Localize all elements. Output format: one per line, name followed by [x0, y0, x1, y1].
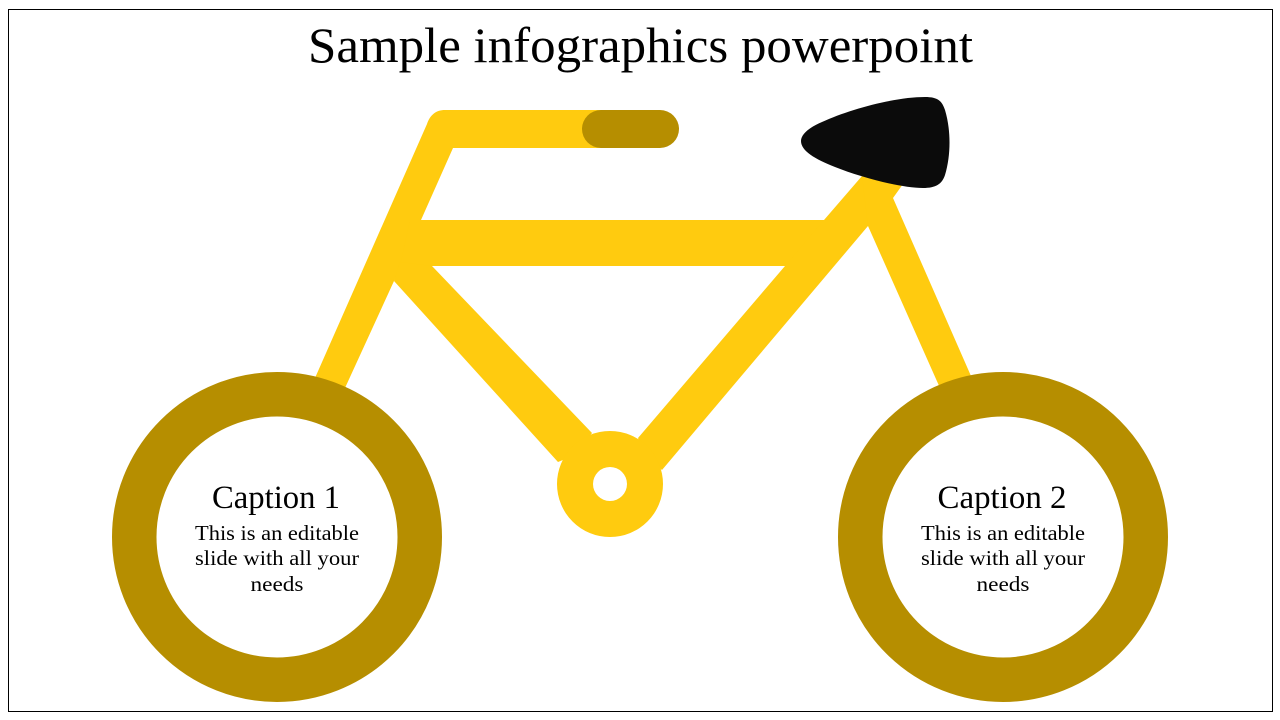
caption 1 heading: Caption 1: [212, 480, 340, 516]
rear stay: [862, 176, 971, 388]
caption 2 body: This is an editable: [921, 521, 1085, 545]
left wheel with caption 1: [134, 394, 420, 680]
saddle: [801, 97, 950, 188]
caption 2 body: [921, 521, 1085, 596]
caption 2 heading: Caption 2: [938, 480, 1066, 516]
caption 1 body: needs: [250, 572, 304, 596]
caption 1 body: This is an editable: [195, 521, 359, 545]
caption 1 body: slide with all your: [195, 546, 359, 570]
caption 1 body: [195, 521, 359, 596]
left wheel ring: [134, 394, 420, 680]
chainring: [557, 431, 663, 537]
title: Sample infographics powerpoint: [308, 17, 973, 73]
caption 2 body: slide with all your: [921, 546, 1085, 570]
right wheel ring: [860, 394, 1146, 680]
bicycle frame: [315, 110, 971, 537]
handlebar and front fork: [315, 110, 640, 388]
right wheel with caption 2: [860, 394, 1146, 680]
bicycle illustration: [134, 97, 1146, 680]
seat tube: [638, 176, 893, 470]
down tube: [394, 262, 592, 462]
caption 2 body: needs: [976, 572, 1030, 596]
top tube: [400, 220, 840, 266]
handlebar grip: [582, 110, 679, 148]
